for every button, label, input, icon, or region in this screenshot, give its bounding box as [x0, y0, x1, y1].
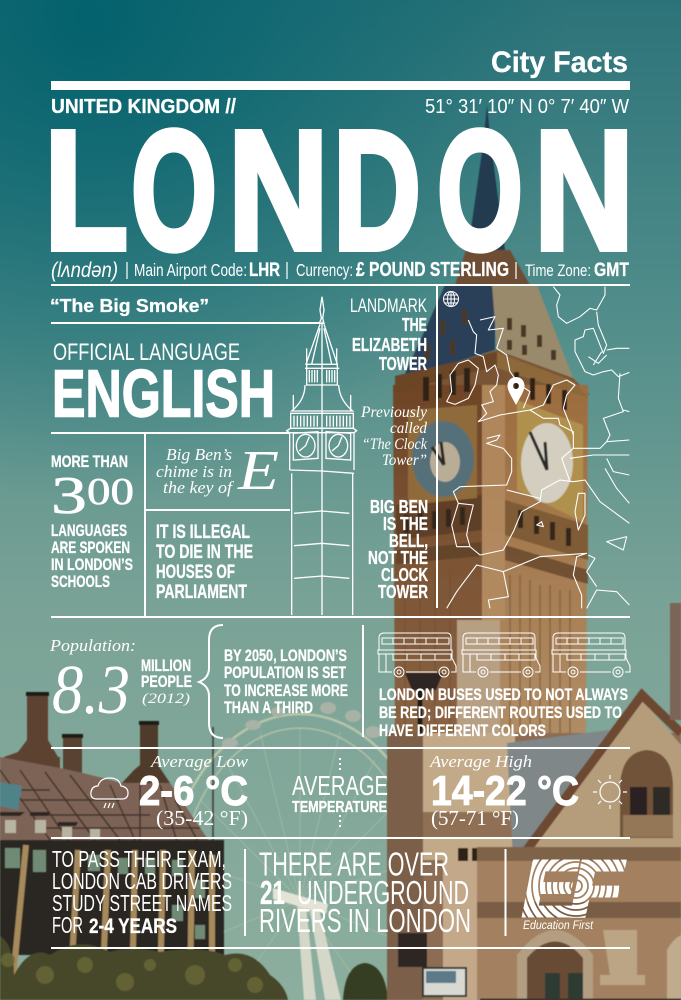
key facts row: Time Zone:: [525, 261, 591, 280]
population stat: [49, 636, 192, 729]
tower roof: [403, 285, 495, 378]
divider lines: [51, 285, 630, 948]
logo: EF Education First: Education First: [523, 918, 594, 932]
underground rivers fact: THERE ARE OVER: [259, 846, 449, 882]
population stat: 8.3: [52, 652, 130, 729]
cab drivers fact: STUDY STREET NAMES: [52, 890, 232, 916]
population projection: TO INCREASE MORE: [224, 682, 348, 700]
underground rivers fact: 21: [260, 874, 285, 911]
icon: three double-decker buses: [378, 633, 630, 677]
icon: location pin: [508, 377, 524, 405]
trees: [0, 936, 288, 1000]
logo: EF Education First: F: [570, 844, 625, 933]
parliament fact: PARLIAMENT: [156, 581, 247, 603]
population projection: [224, 647, 348, 717]
wheel pods: [222, 702, 381, 748]
underground rivers fact: [259, 846, 471, 939]
chime fact: [156, 440, 279, 502]
key facts row: GMT: [594, 260, 629, 281]
parliament fact: IT IS ILLEGAL: [156, 521, 250, 543]
chime fact: chime is in: [156, 462, 232, 481]
clock faces: [408, 405, 477, 505]
chime fact: E: [237, 440, 279, 502]
brace: [199, 625, 223, 738]
icon: rain cloud: [91, 778, 128, 808]
street lamp: [405, 673, 443, 690]
key facts row: [51, 259, 629, 282]
underground rivers fact: UNDERGROUND: [297, 874, 469, 911]
landmark text: ELIZABETH: [352, 335, 427, 355]
nickname: “The Big Smoke”: [50, 295, 209, 316]
Big Ben bell fact: CLOCK: [381, 565, 428, 585]
wheel legs: [297, 905, 341, 1000]
right gable: [525, 700, 681, 860]
cab drivers fact: 2-4 YEARS: [89, 915, 177, 938]
right buildings: [387, 733, 681, 1000]
buses fact: [379, 685, 628, 740]
Big Ben bell fact: IS THE: [383, 514, 428, 534]
parliament fact: TO DIE IN THE: [156, 541, 253, 563]
key facts row: Main Airport Code:: [134, 260, 247, 280]
previous name text: called: [390, 420, 427, 437]
Big Ben bell fact: BIG BEN: [370, 497, 428, 517]
average temperature label: TEMPERATURE: [292, 799, 387, 816]
cab drivers fact: [52, 846, 232, 938]
population projection: BY 2050, LONDON’S: [224, 647, 347, 665]
title: LONDON: O: [131, 96, 217, 286]
languages fact: IN LONDON’S: [51, 556, 133, 574]
icon: Big Ben tower outline: [287, 297, 357, 615]
cab drivers fact: FOR: [52, 912, 83, 938]
languages fact: MORE THAN: [51, 453, 128, 471]
average temperature label: [292, 758, 388, 830]
chime fact: the key of: [163, 478, 235, 497]
key facts row: (lʌndən): [51, 259, 118, 282]
average high: (57-71 °F): [431, 806, 519, 830]
previous name text: Tower”: [382, 452, 427, 469]
chime fact: Big Ben’s: [166, 445, 232, 464]
population projection: THAN A THIRD: [224, 699, 313, 717]
average high: [429, 752, 579, 830]
languages fact: ARE SPOKEN: [51, 539, 130, 557]
logo: EF Education First: [522, 860, 627, 929]
tower body: [393, 385, 482, 740]
population stat: PEOPLE: [141, 673, 192, 691]
key facts row: Currency:: [296, 260, 353, 280]
title: LONDON: L: [44, 96, 128, 286]
landmark text: [350, 296, 427, 374]
population stat: MILLION: [141, 657, 191, 675]
top bar: [51, 81, 630, 90]
parliament fact: [156, 521, 253, 603]
average low: Average Low: [150, 752, 248, 771]
average low: 2-6 °C: [139, 767, 248, 814]
previous name text: [360, 404, 428, 469]
Big Ben bell fact: [368, 497, 428, 602]
landmark text: TOWER: [379, 354, 427, 374]
icon: globe: [444, 292, 458, 306]
languages fact: SCHOOLS: [51, 573, 110, 591]
landmark text: LANDMARK: [350, 296, 427, 317]
Big Ben bell fact: TOWER: [378, 582, 428, 602]
languages fact: [51, 453, 134, 591]
lower church wall: [477, 857, 681, 1000]
cab drivers fact: TO PASS THEIR EXAM,: [52, 846, 226, 872]
left building: [4, 693, 60, 770]
tower spire: [460, 105, 512, 285]
buses fact: HAVE DIFFERENT COLORS: [379, 721, 546, 740]
official language: [52, 339, 275, 432]
coordinates: 51° 31′ 10″ N 0° 7′ 40″ W: [425, 96, 629, 118]
population stat: Population:: [49, 636, 136, 655]
population projection: POPULATION IS SET: [224, 664, 346, 682]
languages fact: 00: [87, 471, 134, 513]
ferris wheel: [165, 714, 435, 1000]
title: LONDON: O: [437, 96, 523, 286]
key facts row: £ POUND STERLING: [356, 259, 509, 281]
key facts row: LHR: [249, 260, 280, 281]
Big Ben bell fact: BELL,: [389, 531, 428, 551]
cab drivers fact: LONDON CAB DRIVERS: [52, 868, 232, 894]
languages fact: 3: [51, 467, 87, 525]
previous name text: Previously: [360, 404, 427, 421]
official language: OFFICIAL LANGUAGE: [53, 339, 240, 366]
average high: 14-22 °C: [431, 767, 579, 814]
average high: Average High: [429, 752, 532, 771]
official language: ENGLISH: [52, 356, 275, 432]
average low: (35-42 °F): [156, 806, 248, 830]
icon: sun: [593, 775, 627, 809]
parliament fact: HOUSES OF: [156, 561, 235, 583]
country label: UNITED KINGDOM //: [51, 96, 236, 118]
map of Europe: [447, 287, 629, 608]
slate roof: [507, 730, 640, 860]
average temperature label: AVERAGE: [292, 770, 388, 801]
title: LONDON: D: [333, 96, 421, 286]
average low: [139, 752, 248, 830]
population stat: (2012): [142, 691, 190, 707]
previous name text: “The Clock: [362, 436, 428, 453]
landmark text: THE: [402, 315, 427, 335]
title: LONDON: N: [228, 96, 329, 286]
underground rivers fact: RIVERS IN LONDON: [259, 902, 471, 939]
logo: EF Education First: E: [522, 844, 579, 933]
title: LONDON: N: [534, 96, 634, 286]
heading: City Facts: City Facts: [491, 46, 628, 79]
languages fact: LANGUAGES: [51, 522, 127, 540]
Big Ben bell fact: NOT THE: [368, 548, 428, 568]
